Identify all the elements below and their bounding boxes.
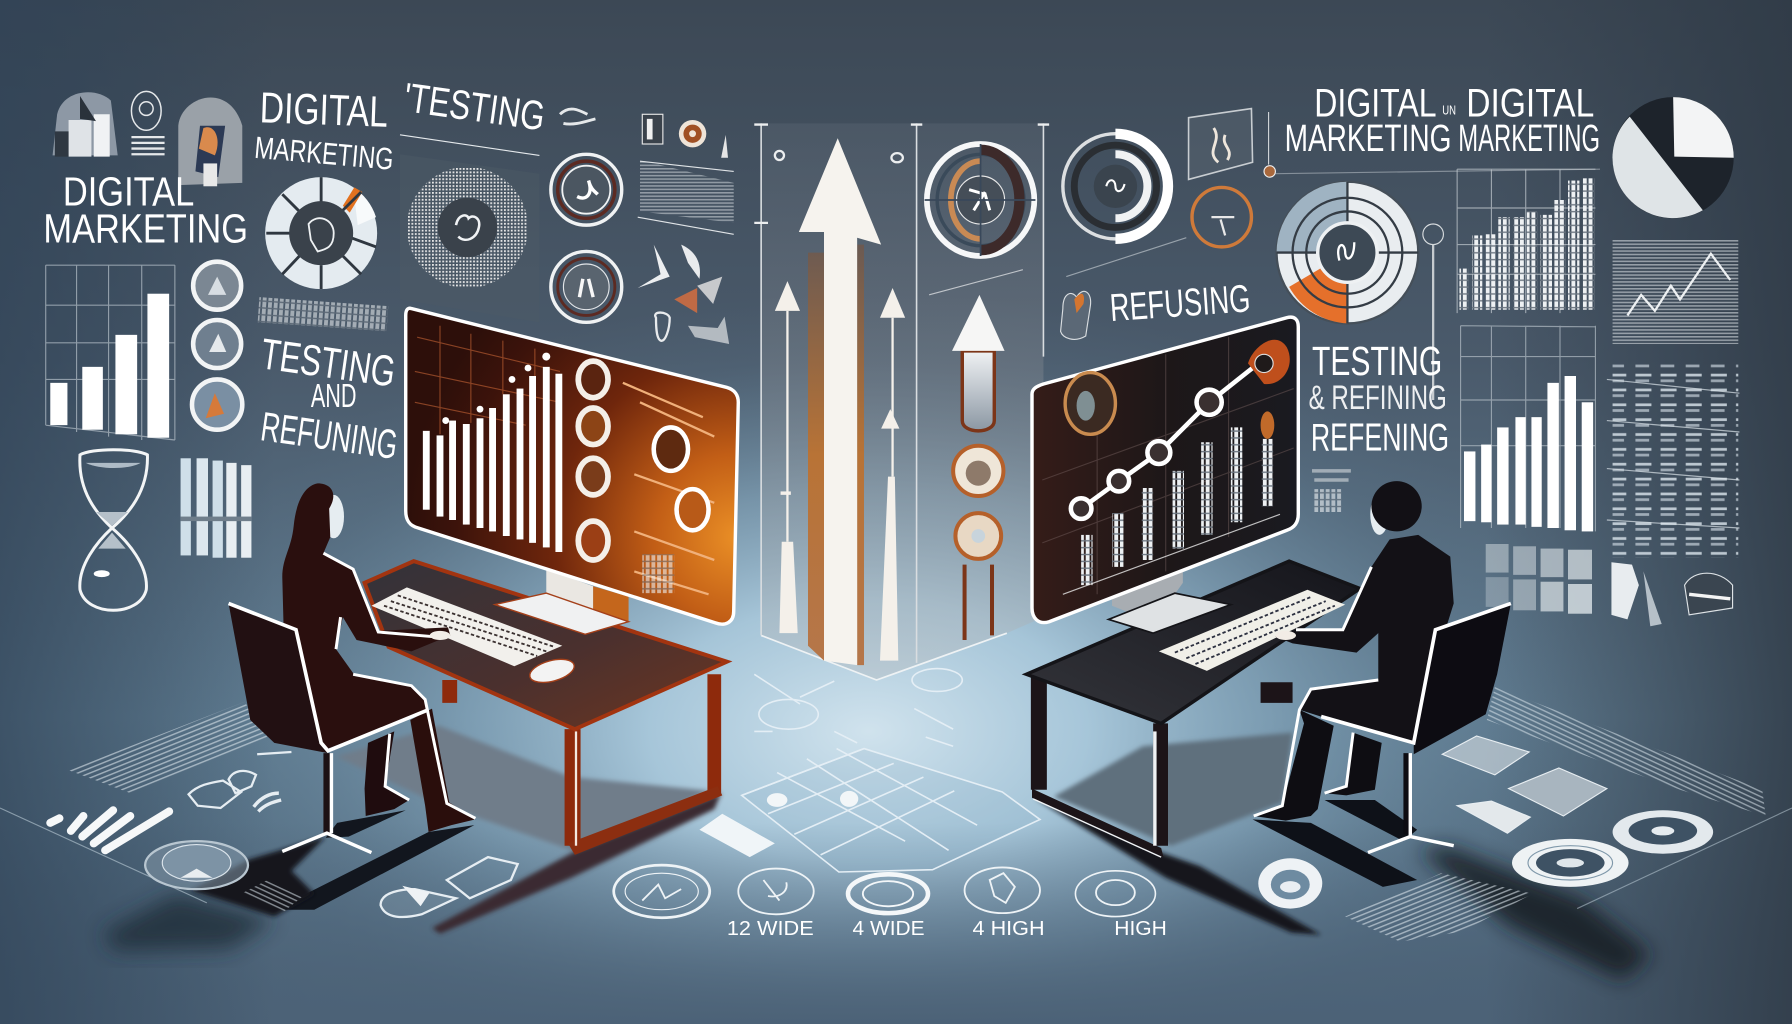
chart: vertical bars [181,458,251,558]
bronze stems [965,565,992,640]
arrow: right hollow [952,295,1005,431]
rear leg [1325,733,1382,795]
monitor grid [415,326,560,434]
monitor blobs [1065,340,1290,439]
heading: digital marketing left: DIGITAL [63,169,194,215]
floor ring medium [1613,810,1713,854]
icon: pin [1264,112,1275,177]
icon: pinwheel [638,245,729,344]
chart: grid bars upper [1457,169,1595,313]
monitor stand [1109,558,1231,633]
icon: building blocks [53,92,118,157]
chart: grid bars lower [1461,326,1595,531]
torso and thigh [282,483,450,749]
torso [1275,535,1454,743]
desk legs [442,674,722,855]
icon: refusing mark [1061,291,1091,339]
body highlights [1254,567,1378,816]
monitor grid [1042,337,1294,594]
heading: digital marketing left: MARKETING [43,205,248,251]
hand [1275,631,1296,640]
arrow: large centre [799,138,881,665]
icon: badge 5 [1075,871,1155,917]
window tile grid [1486,544,1592,614]
floor ring small [1258,858,1322,909]
icon: bronze ring upper [953,446,1003,496]
icon: ring one [551,154,622,225]
person: man with chair [1254,481,1511,853]
arrow: right small [880,288,905,661]
icon: figure tile [178,97,242,186]
front leg [1254,710,1334,821]
icon: top dial one [925,144,1035,256]
body highlights [323,553,475,818]
bottom icon row with labels [614,865,1167,940]
icon: segmented wheel [265,177,377,289]
label: 4 wide: 4 WIDE [853,917,925,940]
floor doodle lower [381,857,518,917]
panel: left wall icons and headings [43,74,734,610]
face [323,495,344,538]
floor ring icon [145,841,248,889]
small squiggle tile [1312,471,1351,512]
floor hatch dark [241,880,302,912]
front leg [410,709,475,832]
panel: right wall icons and headings [925,82,1739,626]
floor panel: right data sheets [1258,687,1792,942]
floor ring large [1512,839,1629,887]
chair [1321,603,1511,853]
icon: top dial two [1063,134,1168,239]
heading: digital marketing right: DIGITAL [1466,82,1594,126]
arrow: left small [775,281,800,633]
floor shadows [103,726,1651,981]
heading: testing refining refening: & REFINING [1309,379,1447,417]
v-shaped backing panel [761,123,1043,680]
heading: digital marketing top: MARKETING [253,130,395,177]
heading: testing and refuning: AND [311,378,357,415]
keyboard [371,587,562,666]
misc shapes [1611,562,1733,626]
heading: testing refining refening: TESTING [1312,338,1442,384]
panel: dotted disc [400,135,539,322]
bar strip above testing [258,297,388,331]
keyboard [1159,590,1345,671]
heading: digital marketing right: MARKETING [1285,117,1451,159]
icon: badge 4 [965,867,1040,913]
person: woman with chair [229,483,475,853]
icon: bulb [131,91,165,154]
monitor stand [495,569,629,634]
heading: digital marketing top: DIGITAL [259,84,389,137]
chair [229,603,429,853]
floor sheet blobs [1442,736,1607,833]
icon: ring two [551,251,622,322]
desk top [1026,561,1360,723]
monitor trend line [1071,363,1258,519]
heading: digital marketing right: UN [1442,103,1456,117]
mouse [527,655,577,687]
hand [430,631,450,640]
desk top [365,561,727,729]
table: tiny data grid [1607,363,1739,558]
monitor side panel [623,383,714,594]
monitor: right [1032,317,1298,623]
icon: target wheel [1277,182,1418,323]
icon: hourglass [80,450,147,610]
head [1371,481,1422,531]
desk: right [1026,558,1360,857]
desk: left [365,561,727,855]
heading: digital marketing top [253,84,395,177]
chart: striped line chart [1613,240,1738,344]
heading: testing and refuning: TESTING [258,330,398,397]
floor calendar grid [699,669,1040,872]
floor hatch [1345,873,1533,942]
chart: pie [1612,97,1734,218]
icon: badge 1 [614,865,710,918]
heading: testing refining refening [1309,338,1449,459]
monitor towers [1081,427,1273,585]
panel: striped text block [638,160,734,234]
heading: testing and refuning: REFUNING [258,403,400,468]
face [1370,494,1389,535]
monitor: left [406,308,738,624]
icon: bronze ring lower [955,513,1001,559]
monitor bars [423,367,562,552]
panel: centre growth arrows [754,123,1049,680]
chart: left bar chart [46,265,175,440]
label: high: HIGH [1114,917,1167,940]
small icons top row [642,114,728,158]
small gauge stem [1423,224,1443,400]
monitor circles [578,361,608,560]
heading: testing and refuning [258,330,400,468]
label: 12 wide: 12 WIDE [727,917,814,940]
label: 4 high: 4 HIGH [973,917,1045,940]
rear leg [365,731,409,816]
small icon cluster [560,109,595,124]
orange side glow [808,245,864,665]
icons: stacked circles [192,262,242,430]
icon: orange ring [1192,187,1251,247]
small markers [754,125,1049,295]
heading: testing refining refening: REFENING [1311,416,1449,459]
monitor dots [442,353,550,424]
icon: badge 3 [848,874,928,913]
heading: digital marketing left [43,169,248,251]
floor doodle icons [189,752,291,811]
heading: digital marketing right: DIGITAL [1314,82,1437,126]
heading: refusing: REFUSING [1108,277,1252,330]
heading: testing top: 'TESTING [401,74,548,139]
icon: badge 2 [738,869,814,914]
floor mini bar chart [50,810,169,850]
heading: digital marketing right: MARKETING [1458,117,1600,159]
icon: squiggle tile [1189,109,1253,179]
heading: digital marketing right [1285,82,1600,159]
floor panel: left data sheets [0,702,518,917]
